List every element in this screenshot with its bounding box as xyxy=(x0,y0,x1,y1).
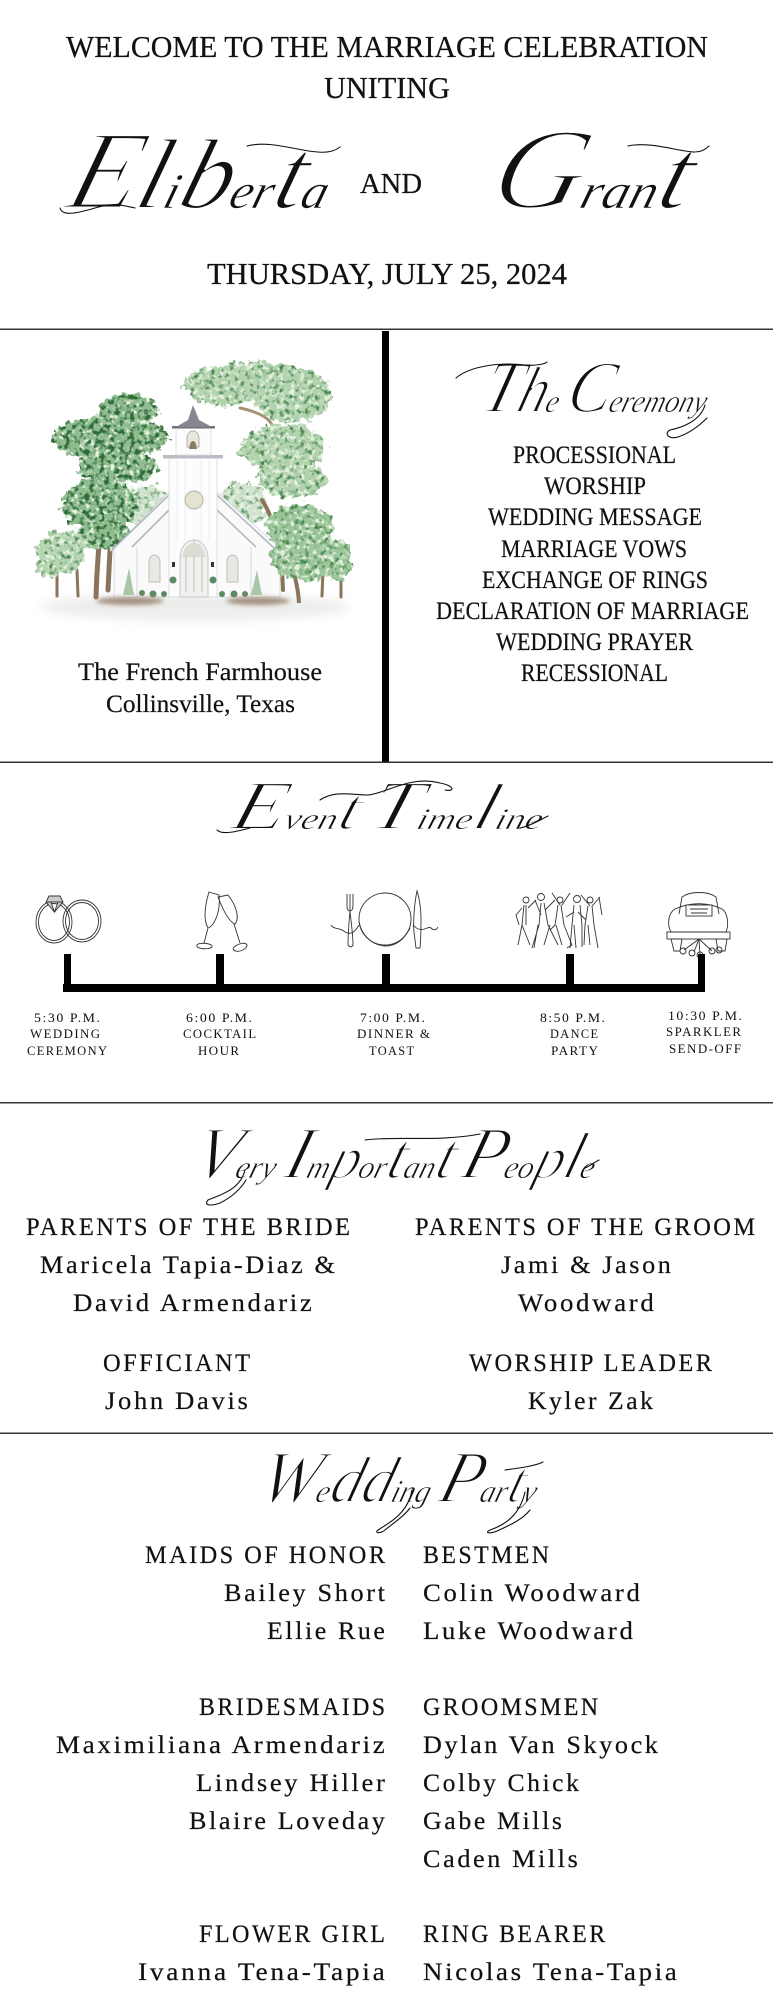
header: welcome line xyxy=(66,29,708,105)
officiant: John Davis xyxy=(105,1388,250,1415)
foliage: left big tree xyxy=(52,394,168,549)
label: 7:00 dinner and toast: TOAST xyxy=(369,1044,416,1058)
parents of the groom xyxy=(415,1214,758,1317)
ceremony order list: PROCESSIONAL xyxy=(513,442,676,469)
venue name: Collinsville, Texas xyxy=(106,691,295,718)
officiant: OFFICIANT xyxy=(103,1350,252,1377)
chapel tower xyxy=(169,458,217,597)
ceremony order list: MARRIAGE VOWS xyxy=(501,536,687,563)
illustration: white chapel among trees xyxy=(35,363,352,621)
ceremony order list: WEDDING PRAYER xyxy=(496,629,693,656)
groomsmen xyxy=(423,1694,660,1873)
bridesmaids: Lindsey Hiller xyxy=(196,1770,388,1797)
label: 6:00 cocktail hour: HOUR xyxy=(198,1044,240,1058)
groom name: Grant xyxy=(479,105,716,233)
ceremony order list: EXCHANGE OF RINGS xyxy=(482,567,708,594)
timeline bar with ticks xyxy=(63,954,705,992)
parents of the bride: PARENTS OF THE BRIDE xyxy=(26,1214,352,1241)
chapel body xyxy=(112,405,280,598)
worship leader: WORSHIP LEADER xyxy=(469,1350,714,1377)
heading: event timeline: Event Timeline xyxy=(222,767,558,845)
foliage: lower right tree xyxy=(266,504,352,582)
date: THURSDAY, JULY 25, 2024 xyxy=(207,256,567,291)
venue name: The French Farmhouse xyxy=(78,659,322,686)
label: 6:00 cocktail hour: 6:00 P.M. xyxy=(186,1011,254,1025)
wedding party: left column xyxy=(56,1542,388,1986)
groomsmen: Dylan Van Skyock xyxy=(423,1732,660,1759)
ring bearer xyxy=(423,1921,680,1986)
rose window xyxy=(185,491,203,509)
heading: wedding party: Wedding Party xyxy=(251,1437,553,1519)
tree trunks xyxy=(57,408,341,597)
icon: getaway car xyxy=(667,892,730,958)
heading: the ceremony: The Ceremony xyxy=(473,347,723,429)
icon: champagne flutes xyxy=(197,892,247,951)
officiant xyxy=(103,1350,252,1415)
word: and: AND xyxy=(360,169,422,200)
mulch beds xyxy=(96,597,164,605)
label: 7:00 dinner and toast xyxy=(357,1011,432,1058)
worship leader xyxy=(469,1350,714,1415)
parents of the bride: Maricela Tapia-Diaz & xyxy=(40,1252,338,1279)
parents of the groom: Woodward xyxy=(518,1290,656,1317)
vertical divider bar xyxy=(382,331,389,762)
bride name: Eliberta xyxy=(53,108,353,233)
distant foliage behind chapel xyxy=(122,483,266,527)
bestmen: Luke Woodward xyxy=(423,1618,636,1645)
heading: very important people: Very Important People xyxy=(185,1113,611,1195)
ceremony order list xyxy=(436,442,749,687)
label: 10:30 sparkler send-off xyxy=(666,1009,744,1056)
foliage: far left small tree xyxy=(35,531,88,577)
wedding party: right column xyxy=(423,1542,680,1986)
label: 5:30 ceremony: WEDDING xyxy=(30,1027,102,1041)
label: 10:30 sparkler send-off: SPARKLER xyxy=(666,1025,742,1039)
maids of honor: MAIDS OF HONOR xyxy=(145,1542,388,1569)
label: 5:30 ceremony: CEREMONY xyxy=(27,1044,108,1058)
groomsmen: Caden Mills xyxy=(423,1846,580,1873)
groomsmen: Gabe Mills xyxy=(423,1808,564,1835)
maids of honor: Bailey Short xyxy=(224,1580,388,1607)
ceremony order list: RECESSIONAL xyxy=(521,660,668,687)
parents of the bride xyxy=(26,1214,352,1317)
label: 7:00 dinner and toast: DINNER & xyxy=(357,1027,432,1041)
maids of honor xyxy=(145,1542,388,1645)
icon: wedding rings xyxy=(36,896,101,943)
venue name xyxy=(78,659,322,718)
lanterns and shrubs xyxy=(172,562,214,567)
parents of the bride: David Armendariz xyxy=(73,1290,314,1317)
groomsmen: GROOMSMEN xyxy=(423,1694,600,1721)
trunks of front right trees xyxy=(286,550,299,603)
label: 7:00 dinner and toast: 7:00 P.M. xyxy=(360,1011,426,1025)
flower girl: Ivanna Tena-Tapia xyxy=(138,1959,388,1986)
bestmen: Colin Woodward xyxy=(423,1580,642,1607)
flower girl xyxy=(138,1921,388,1986)
label: 6:00 cocktail hour: COCKTAIL xyxy=(183,1027,258,1041)
bridesmaids: BRIDESMAIDS xyxy=(199,1694,388,1721)
ground wash xyxy=(40,593,350,621)
label: 5:30 ceremony: 5:30 P.M. xyxy=(34,1011,102,1025)
bestmen xyxy=(423,1542,642,1645)
ring bearer: Nicolas Tena-Tapia xyxy=(423,1959,680,1986)
header: welcome line: WELCOME TO THE MARRIAGE CELEBRATION xyxy=(66,29,708,64)
label: 6:00 cocktail hour xyxy=(183,1011,258,1058)
parents of the groom: Jami & Jason xyxy=(501,1252,674,1279)
worship leader: Kyler Zak xyxy=(528,1388,656,1415)
foliage: upper right tree xyxy=(183,363,332,498)
flower girl: FLOWER GIRL xyxy=(199,1921,388,1948)
label: 8:50 dance party: 8:50 P.M. xyxy=(540,1011,606,1025)
ring bearer: RING BEARER xyxy=(423,1921,608,1948)
bridesmaids xyxy=(56,1694,388,1835)
label: 10:30 sparkler send-off: SEND-OFF xyxy=(669,1042,742,1056)
header: welcome line: UNITING xyxy=(324,70,450,105)
ceremony order list: WEDDING MESSAGE xyxy=(488,504,702,531)
arched door xyxy=(180,540,208,597)
label: 8:50 dance party xyxy=(540,1011,606,1058)
timeline chart xyxy=(27,891,744,1058)
maids of honor: Ellie Rue xyxy=(267,1618,388,1645)
vip panel xyxy=(26,1214,758,1415)
icon: plate and cutlery xyxy=(331,891,438,948)
label: 5:30 ceremony xyxy=(27,1011,108,1058)
parents of the groom: PARENTS OF THE GROOM xyxy=(415,1214,758,1241)
icon: dancing crowd xyxy=(516,893,602,948)
bestmen: BESTMEN xyxy=(423,1542,552,1569)
groomsmen: Colby Chick xyxy=(423,1770,582,1797)
chapel nave xyxy=(114,492,169,597)
bridesmaids: Maximiliana Armendariz xyxy=(56,1732,388,1759)
label: 8:50 dance party: DANCE xyxy=(550,1027,600,1041)
label: 10:30 sparkler send-off: 10:30 P.M. xyxy=(668,1009,744,1023)
label: 8:50 dance party: PARTY xyxy=(551,1044,600,1058)
bridesmaids: Blaire Loveday xyxy=(189,1808,388,1835)
side windows xyxy=(149,555,160,582)
ceremony order list: WORSHIP xyxy=(544,473,646,500)
